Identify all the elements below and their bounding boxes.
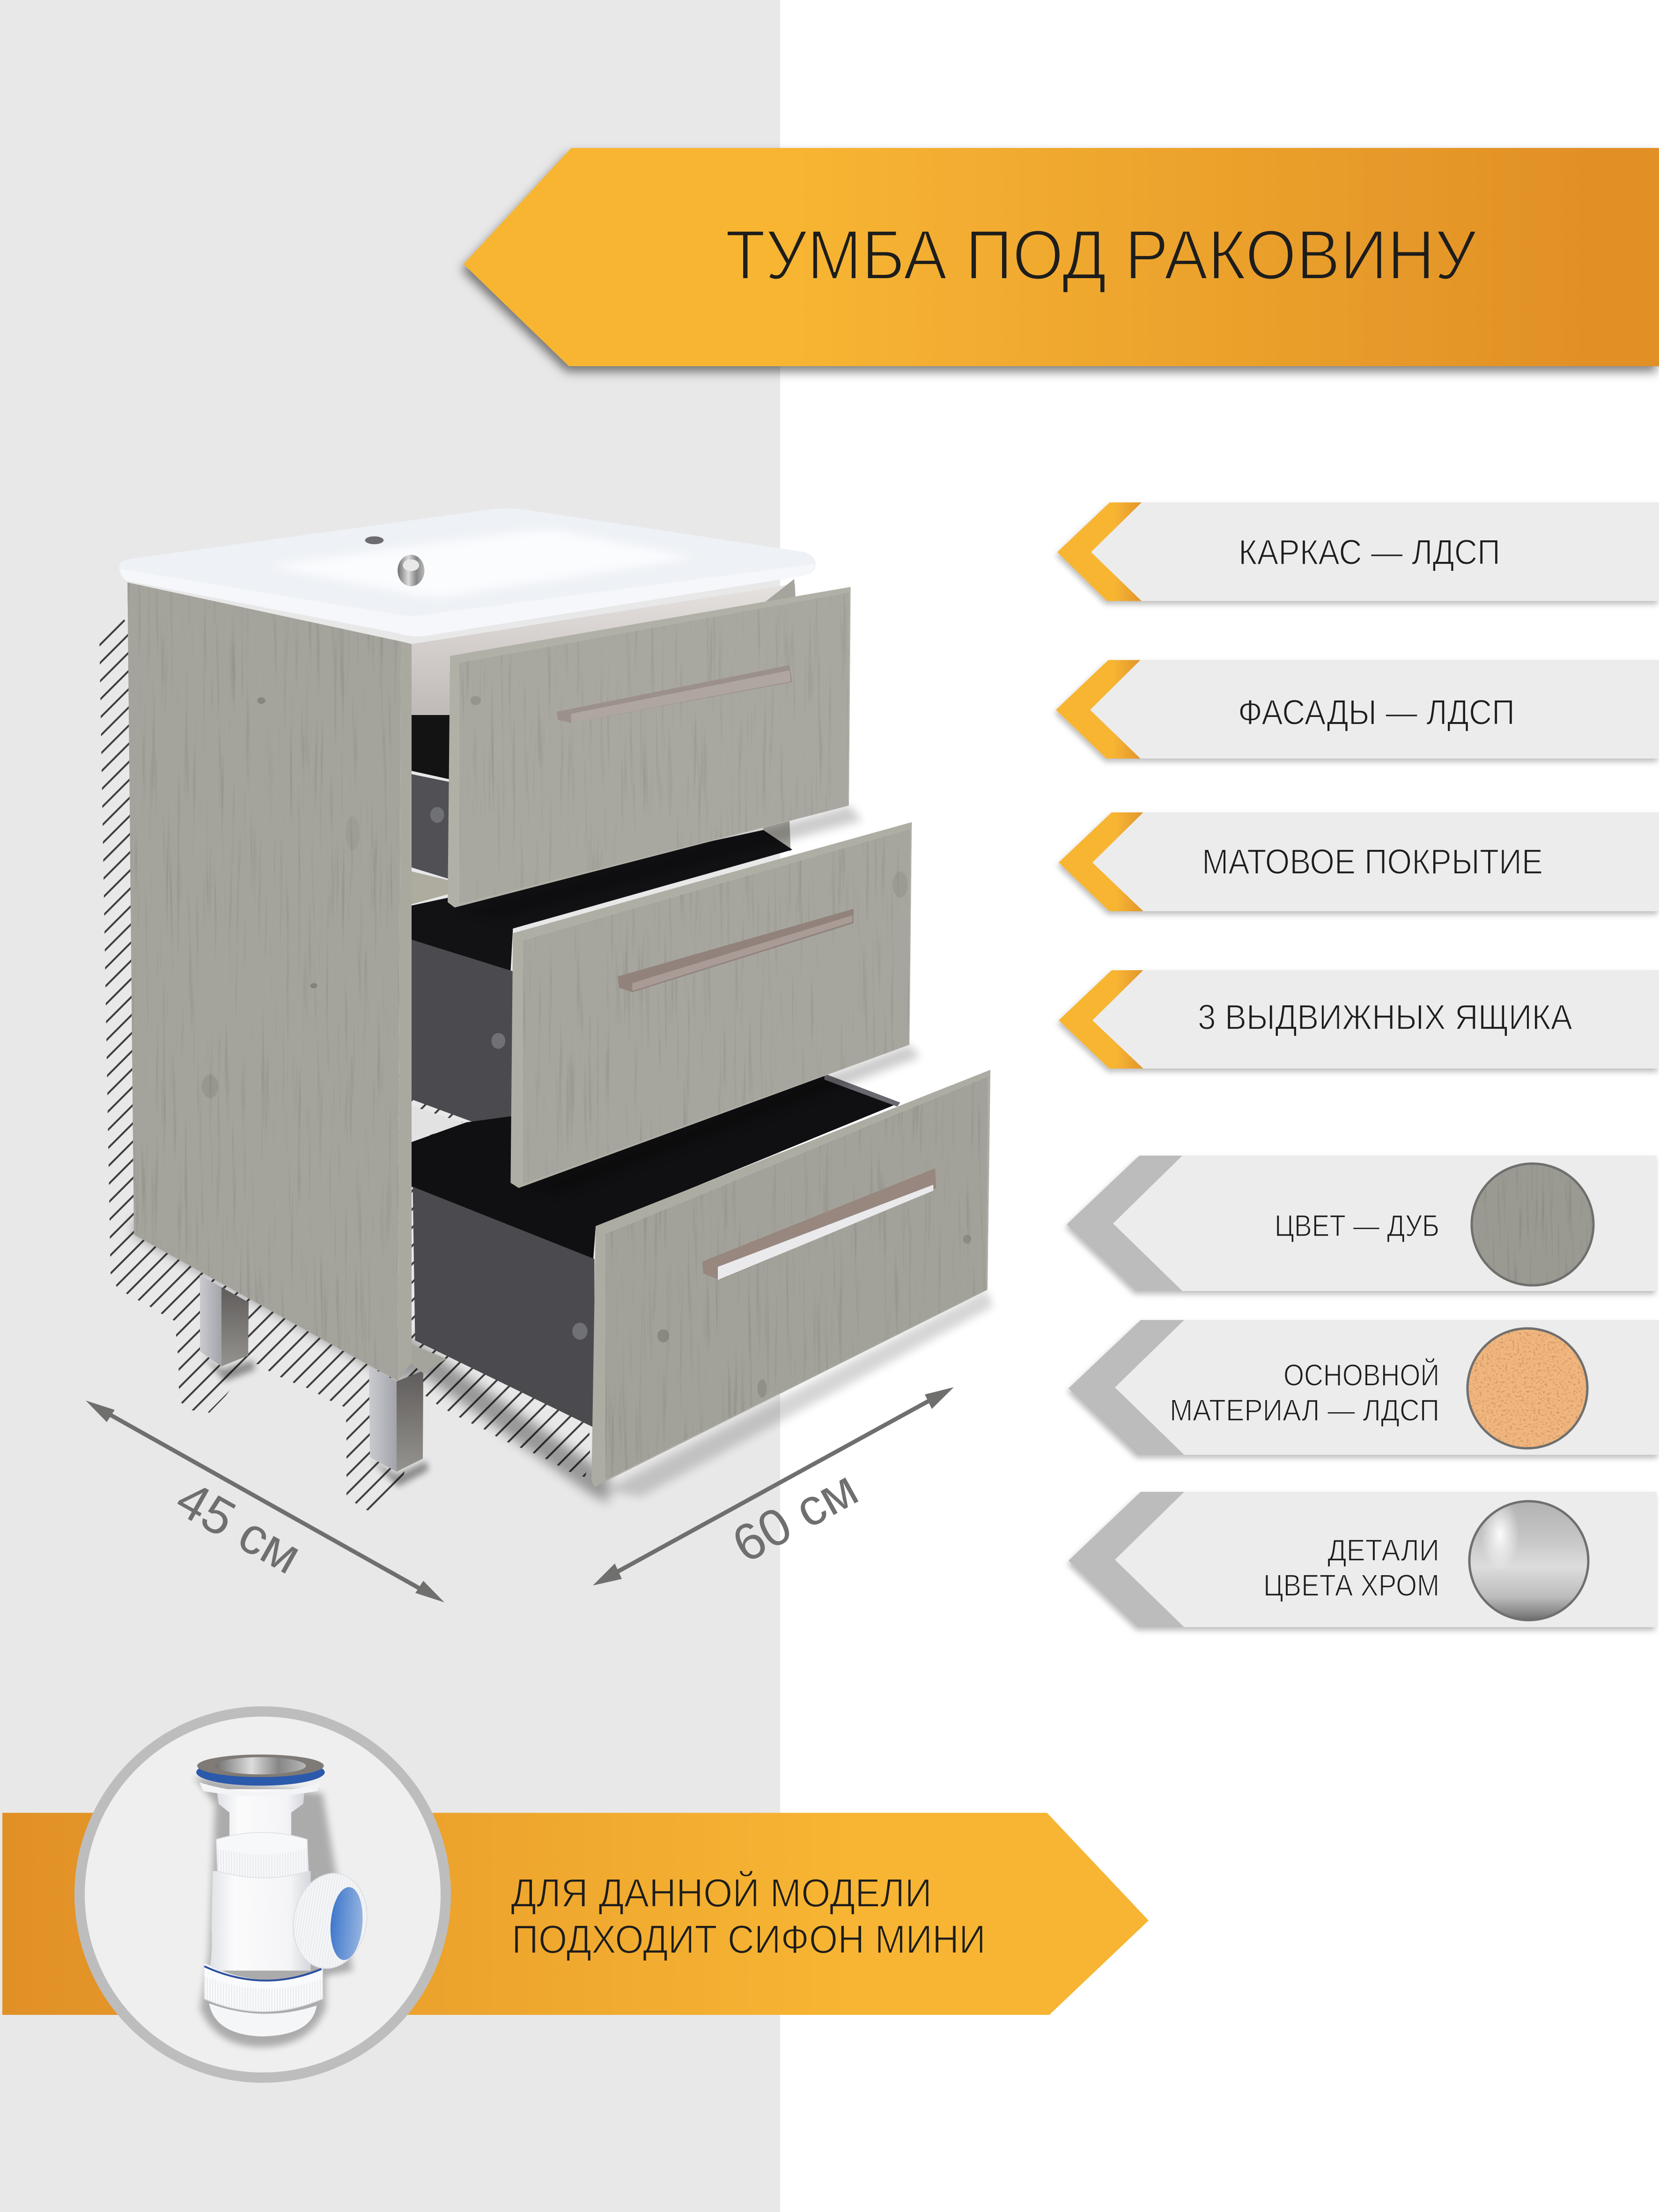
tag shape bbox=[1059, 812, 1659, 911]
swatch tag: chipboard material bbox=[1069, 1320, 1659, 1455]
tag text bbox=[1263, 1533, 1439, 1602]
banner text: ПОДХОДИТ СИФОН МИНИ bbox=[512, 1917, 986, 1962]
sink basin bbox=[119, 509, 816, 636]
cabinet right end piece bbox=[763, 579, 796, 852]
cabinet shadows bbox=[134, 1217, 609, 1503]
lower nut bbox=[204, 1962, 323, 2012]
dimension: width 60 cm bbox=[593, 1387, 954, 1585]
cabinet side panel bbox=[127, 582, 412, 1381]
banner arrow shape bbox=[464, 148, 1659, 366]
tag shape bbox=[1067, 1156, 1657, 1291]
dimension label: 45 см bbox=[167, 1470, 311, 1585]
drawer handle bbox=[618, 909, 854, 992]
cabinet leg: front bbox=[369, 1366, 423, 1472]
sink underside bbox=[412, 583, 796, 722]
upper nut bbox=[216, 1832, 308, 1878]
tag shape bbox=[1069, 1492, 1657, 1627]
tag text: ЦВЕТ — ДУБ bbox=[1275, 1209, 1439, 1243]
swatch tag: chrome details bbox=[1069, 1492, 1657, 1627]
top drawer front bbox=[448, 587, 851, 907]
bottom drawer box bbox=[412, 1074, 900, 1428]
vanity cabinet with sink and drawers bbox=[119, 509, 993, 1497]
tag text: 3 ВЫДВИЖНЫХ ЯЩИКА bbox=[1198, 997, 1572, 1037]
dimension label: 60 см bbox=[723, 1459, 867, 1574]
tag text: КАРКАС — ЛДСП bbox=[1239, 532, 1500, 572]
background: grey left column bbox=[0, 0, 780, 2212]
tag shape bbox=[1059, 970, 1659, 1069]
tag text: МАТОВОЕ ПОКРЫТИЕ bbox=[1202, 842, 1543, 881]
middle drawer front shadow bbox=[522, 1045, 921, 1194]
feature tag: three drawers bbox=[1059, 970, 1659, 1069]
title text: ТУМБА ПОД РАКОВИНУ bbox=[725, 215, 1477, 294]
top drawer front shadow bbox=[459, 806, 863, 919]
upper drawer interior bbox=[412, 715, 450, 904]
bottom drawer front shadow bbox=[605, 1290, 993, 1497]
banner text bbox=[511, 1870, 986, 1962]
cabinet leg: rear bbox=[200, 1275, 249, 1366]
middle drawer front bbox=[510, 822, 912, 1188]
tag shape bbox=[1056, 660, 1659, 759]
title banner bbox=[464, 148, 1659, 366]
siphon circle bbox=[80, 1711, 446, 2078]
siphon body bbox=[209, 1871, 311, 1970]
feature tag: frame bbox=[1057, 502, 1659, 601]
banner text: ДЛЯ ДАННОЙ МОДЕЛИ bbox=[511, 1870, 932, 1916]
tag text: ЦВЕТА ХРОМ bbox=[1263, 1568, 1439, 1602]
swatch: oak bbox=[1471, 1163, 1594, 1286]
drawer handle bbox=[702, 1168, 936, 1280]
tag text: ФАСАДЫ — ЛДСП bbox=[1238, 693, 1515, 732]
banner arrow shape bbox=[2, 1813, 1149, 2015]
swatch: chrome bbox=[1469, 1501, 1589, 1621]
middle drawer box bbox=[412, 830, 792, 1137]
tag text bbox=[1170, 1358, 1439, 1427]
tag text: ДЕТАЛИ bbox=[1327, 1533, 1439, 1567]
siphon neck bbox=[217, 1789, 305, 1839]
siphon illustration bbox=[194, 1755, 374, 2047]
dimension: depth 45 cm bbox=[86, 1401, 444, 1602]
gap below middle drawer bbox=[412, 1106, 466, 1141]
outlet cap bbox=[287, 1869, 374, 1973]
bottom banner bbox=[2, 1813, 1149, 2015]
feature tag: matte finish bbox=[1059, 812, 1659, 911]
siphon bottom dome bbox=[209, 2003, 317, 2036]
diagonal floor and wall hatching bbox=[99, 613, 590, 1514]
double arrow bbox=[86, 1401, 444, 1602]
bottom drawer front bbox=[591, 1070, 990, 1487]
tag shape bbox=[1057, 502, 1659, 601]
double arrow bbox=[593, 1387, 954, 1585]
drain flange bbox=[196, 1755, 325, 1796]
feature tag: fronts bbox=[1056, 660, 1659, 759]
tag shape bbox=[1069, 1320, 1659, 1455]
siphon shadow bbox=[194, 1777, 353, 2047]
tag text: ОСНОВНОЙ bbox=[1283, 1358, 1439, 1392]
drawer handle bbox=[557, 665, 792, 723]
swatch: chipboard bbox=[1467, 1328, 1588, 1449]
tag text: МАТЕРИАЛ — ЛДСП bbox=[1170, 1393, 1439, 1427]
cabinet bottom rail bbox=[412, 1344, 447, 1373]
swatch tag: oak colour bbox=[1067, 1156, 1657, 1291]
